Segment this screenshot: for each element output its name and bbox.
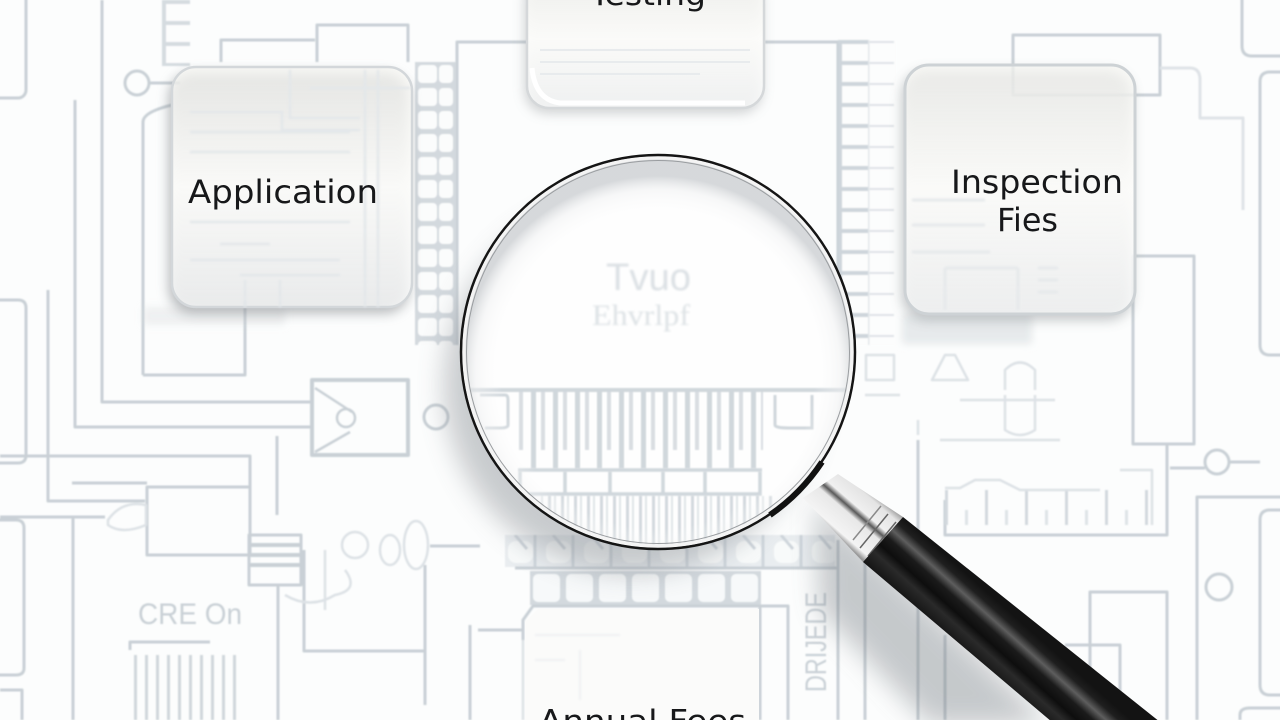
small components under inspection card	[865, 355, 1060, 440]
bottom chip band	[505, 535, 838, 568]
right ladder	[838, 40, 896, 345]
magnified chip	[470, 390, 850, 548]
faint traces in card	[190, 70, 410, 307]
label: Inspection	[951, 163, 1123, 201]
magnifier shadow	[444, 197, 1050, 720]
left logic gate	[108, 504, 146, 530]
left ladder	[415, 62, 456, 345]
handle	[863, 517, 1160, 720]
magnified faint label: Tvuo	[606, 257, 691, 299]
center traces	[457, 42, 838, 720]
label: Application	[188, 173, 378, 211]
right circuit traces	[838, 0, 1280, 720]
card: Annual Fees	[525, 609, 759, 720]
heat sink	[128, 642, 238, 720]
ferrule	[803, 474, 903, 562]
left circuit traces	[0, 0, 523, 720]
label line 2: Fies	[997, 201, 1058, 239]
card: Testing	[525, 0, 764, 113]
card: Inspection Fees	[902, 65, 1135, 320]
under-card residue blocks	[143, 307, 1032, 344]
label: CRE On: CRE On	[138, 598, 242, 631]
connector stack	[249, 521, 428, 610]
faint traces in card	[912, 200, 1058, 310]
magnifying glass	[461, 155, 1160, 720]
top left ladder	[162, 0, 190, 66]
magnified faint label line 2: Ehvrlpf	[592, 299, 690, 332]
card: Application	[169, 67, 412, 313]
lens	[461, 155, 855, 549]
lens rim	[461, 155, 855, 549]
lens inner shading	[463, 157, 853, 547]
right circuit module	[945, 470, 1152, 525]
vertical label: DRIJEDE	[800, 592, 833, 692]
bottom chip ladder	[523, 571, 788, 720]
